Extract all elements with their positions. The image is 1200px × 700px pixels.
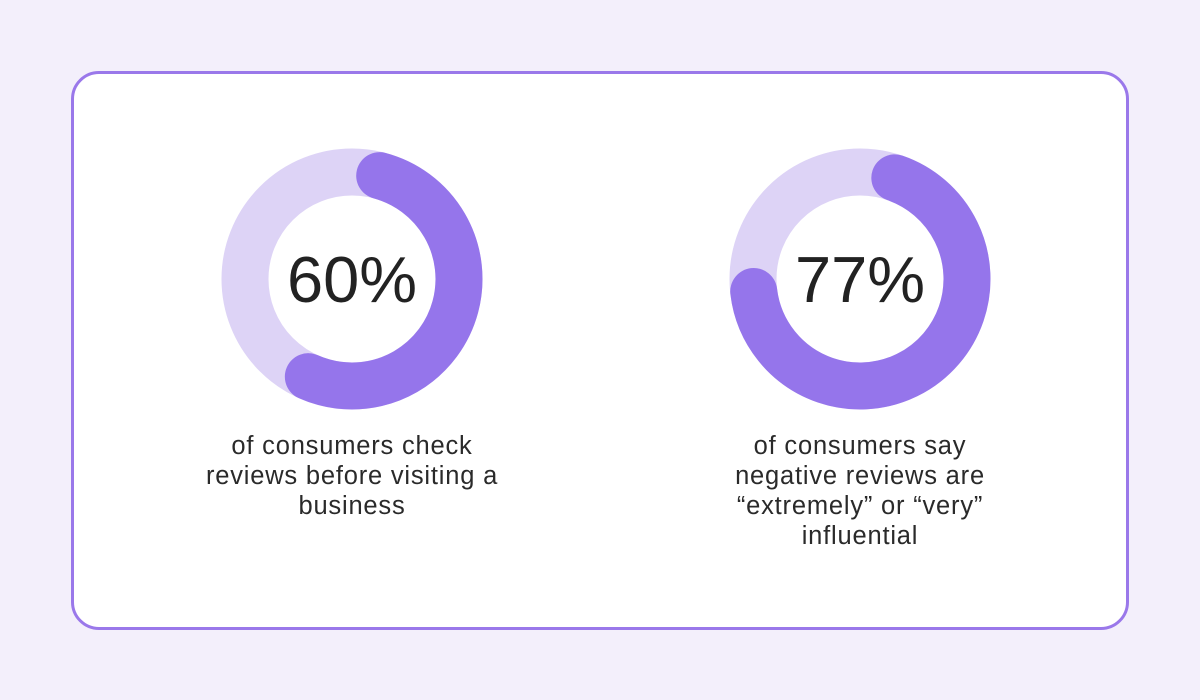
chart: donut 77%: 77% — [795, 243, 925, 316]
caption: 60%: business — [298, 492, 406, 520]
chart: donut 60%: 60% — [287, 243, 417, 316]
caption: 77%: negative reviews are — [735, 462, 985, 490]
caption: 77%: “extremely” or “very” — [737, 492, 983, 520]
caption: 60%: of consumers check — [231, 432, 473, 460]
panel: card — [71, 71, 1129, 630]
caption: 77%: of consumers say — [754, 432, 966, 460]
caption: 60% — [206, 432, 498, 520]
caption: 60%: reviews before visiting a — [206, 462, 498, 490]
caption: 77% — [735, 432, 985, 550]
caption: 77%: influential — [802, 522, 918, 550]
